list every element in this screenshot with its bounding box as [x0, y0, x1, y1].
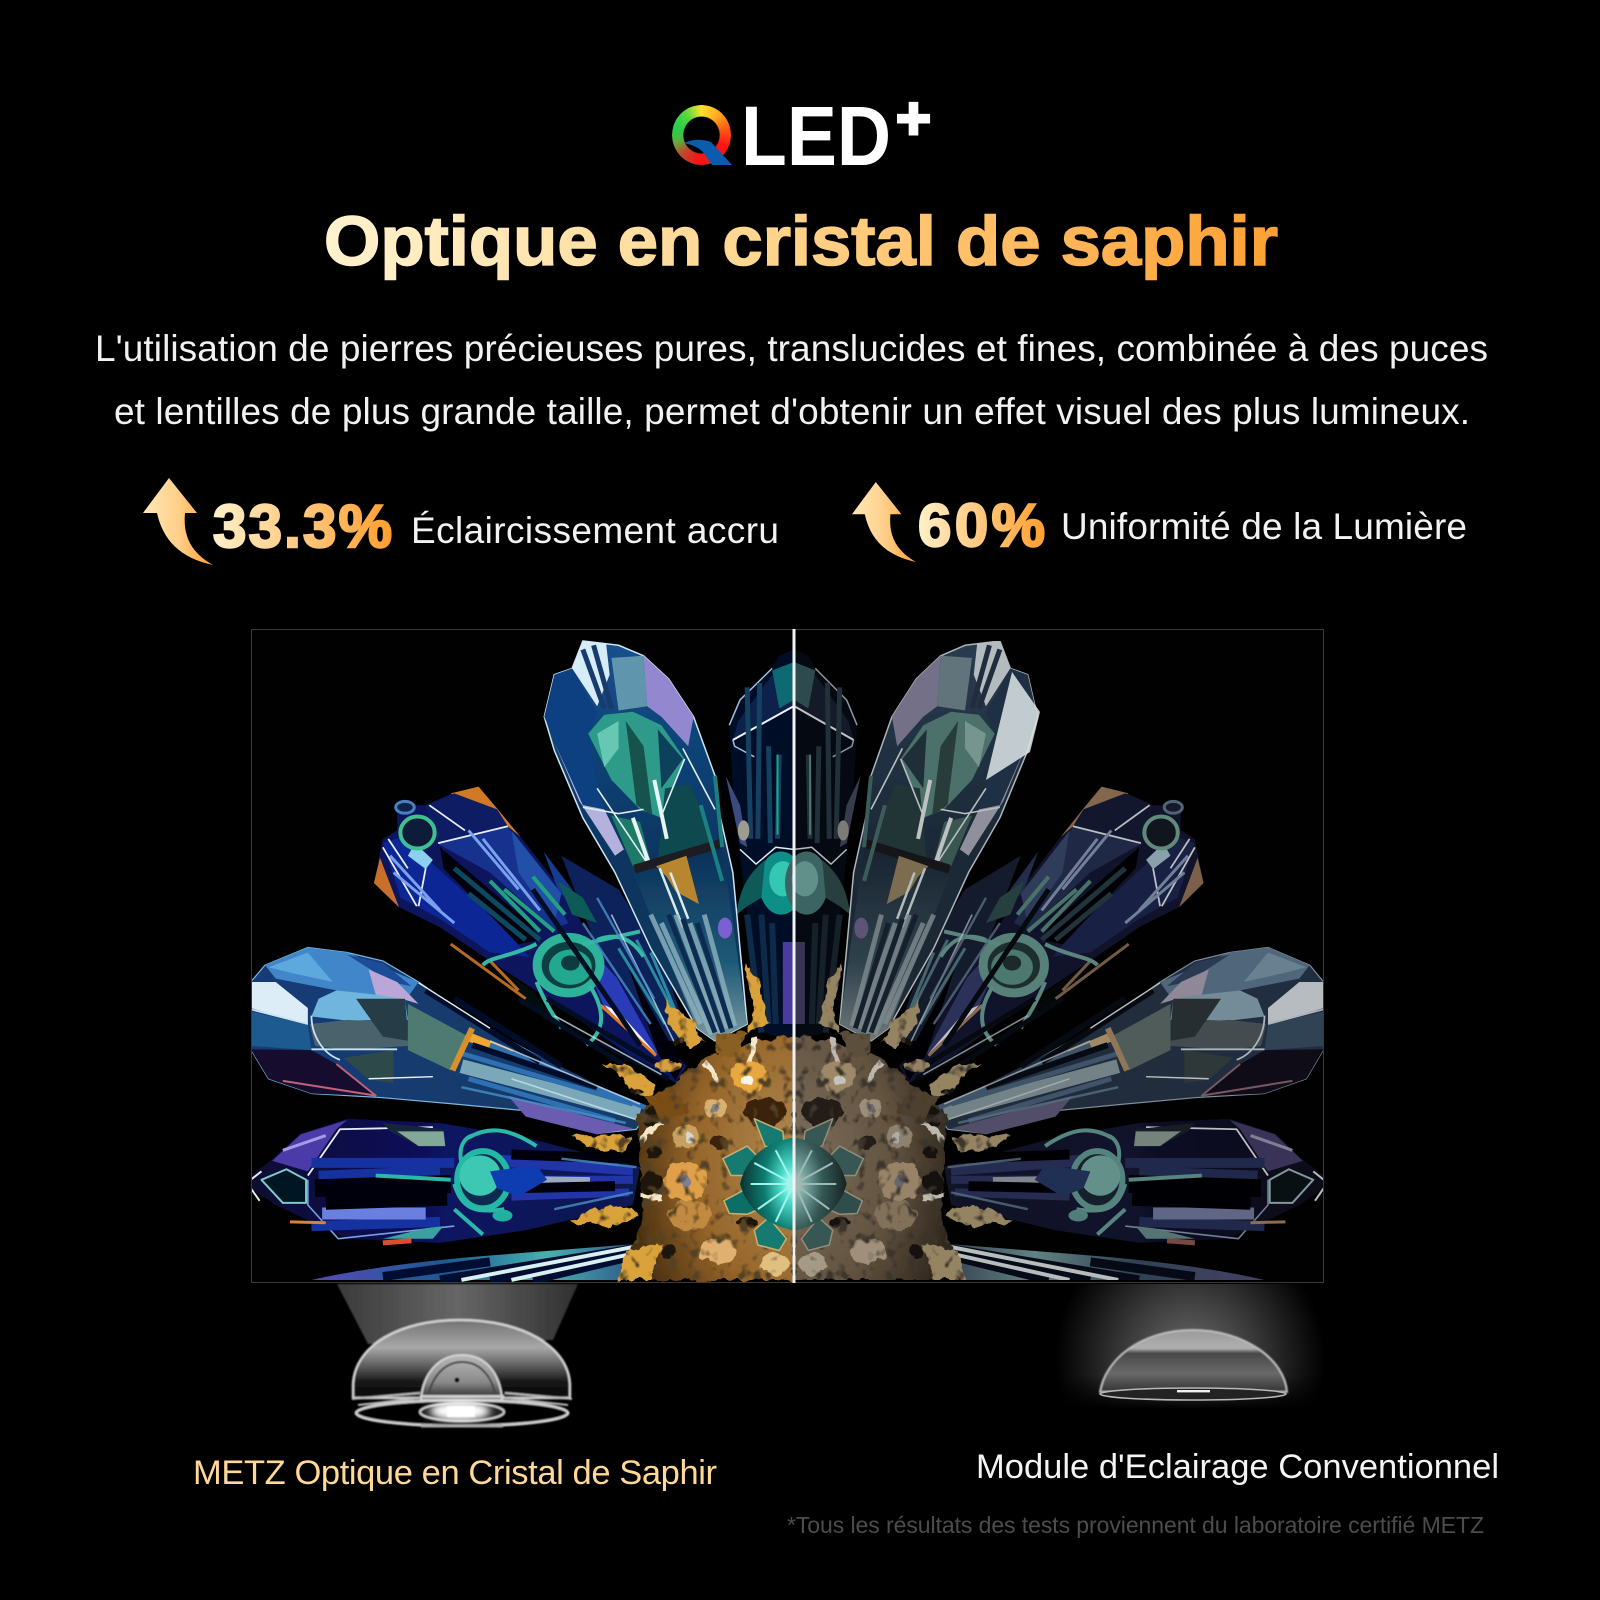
- caption: left lens: METZ Optique en Cristal de Saphir: [193, 1454, 717, 1492]
- description text: L'utilisation de pierres précieuses pures, translucides et fines, combinée à des puces: [95, 328, 1488, 369]
- teal orb: [537, 937, 600, 993]
- description text: [95, 328, 1488, 432]
- upper left petal: [374, 787, 686, 1083]
- base: [1100, 1388, 1286, 1400]
- inner dome: [421, 1355, 502, 1400]
- icon: up arrow: [143, 478, 213, 565]
- QLED+ logo: [672, 100, 931, 170]
- eye discs: [656, 1059, 790, 1275]
- teal orb: [457, 1151, 509, 1208]
- light beam: [337, 1284, 578, 1344]
- top big petal: [544, 641, 747, 1041]
- bottom petal: [311, 1243, 649, 1280]
- outer dome: [353, 1320, 570, 1398]
- stat label: Éclaircissement accru: [411, 510, 779, 551]
- stat value 33.3%: 33.3%: [213, 493, 392, 560]
- inner streak fill between petals: [561, 856, 690, 1041]
- radial streaks: [461, 889, 676, 1209]
- dome: [1100, 1330, 1287, 1392]
- footnote: *Tous les résultats des tests proviennent du laboratoire certifié METZ: [787, 1512, 1484, 1538]
- lens: conventional module: [1052, 1284, 1326, 1409]
- glow fade: [1052, 1375, 1326, 1409]
- stat: brightness: [143, 478, 779, 565]
- stat value 60%: 60%: [918, 492, 1045, 559]
- glow: [1052, 1284, 1326, 1409]
- teal centre flower: [723, 1119, 794, 1250]
- lens dot: [455, 1378, 459, 1382]
- right petal highlight: [986, 672, 1040, 780]
- lower left petal: [251, 1119, 640, 1243]
- caption: right lens: Module d'Eclairage Conventionnel: [976, 1448, 1499, 1486]
- top centre petal: [726, 649, 803, 1041]
- stat label: Uniformité de la Lumière: [1061, 506, 1467, 547]
- base rings: [356, 1400, 568, 1426]
- description text: et lentilles de plus grande taille, permet d'obtenir un effet visuel des plus lumineux.: [114, 391, 1470, 432]
- stat: uniformity: [852, 482, 1467, 562]
- comparison image panel: [251, 629, 1324, 1283]
- golden core: [569, 965, 794, 1280]
- title: Optique en cristal de saphir: [324, 202, 1278, 280]
- divider line: [792, 629, 796, 1283]
- right half: dull crystal flower: [785, 641, 1324, 1280]
- hot spot: [430, 1401, 490, 1421]
- left middle petal: [251, 947, 649, 1134]
- gold flecks: [569, 965, 769, 1226]
- teal bulb: [759, 851, 803, 915]
- icon: up arrow: [852, 482, 916, 562]
- panel border: [252, 630, 1324, 1282]
- left half: vivid crystal flower: [251, 641, 803, 1280]
- lower body: [633, 847, 747, 1041]
- lens: sapphire crystal optic: [337, 1284, 578, 1426]
